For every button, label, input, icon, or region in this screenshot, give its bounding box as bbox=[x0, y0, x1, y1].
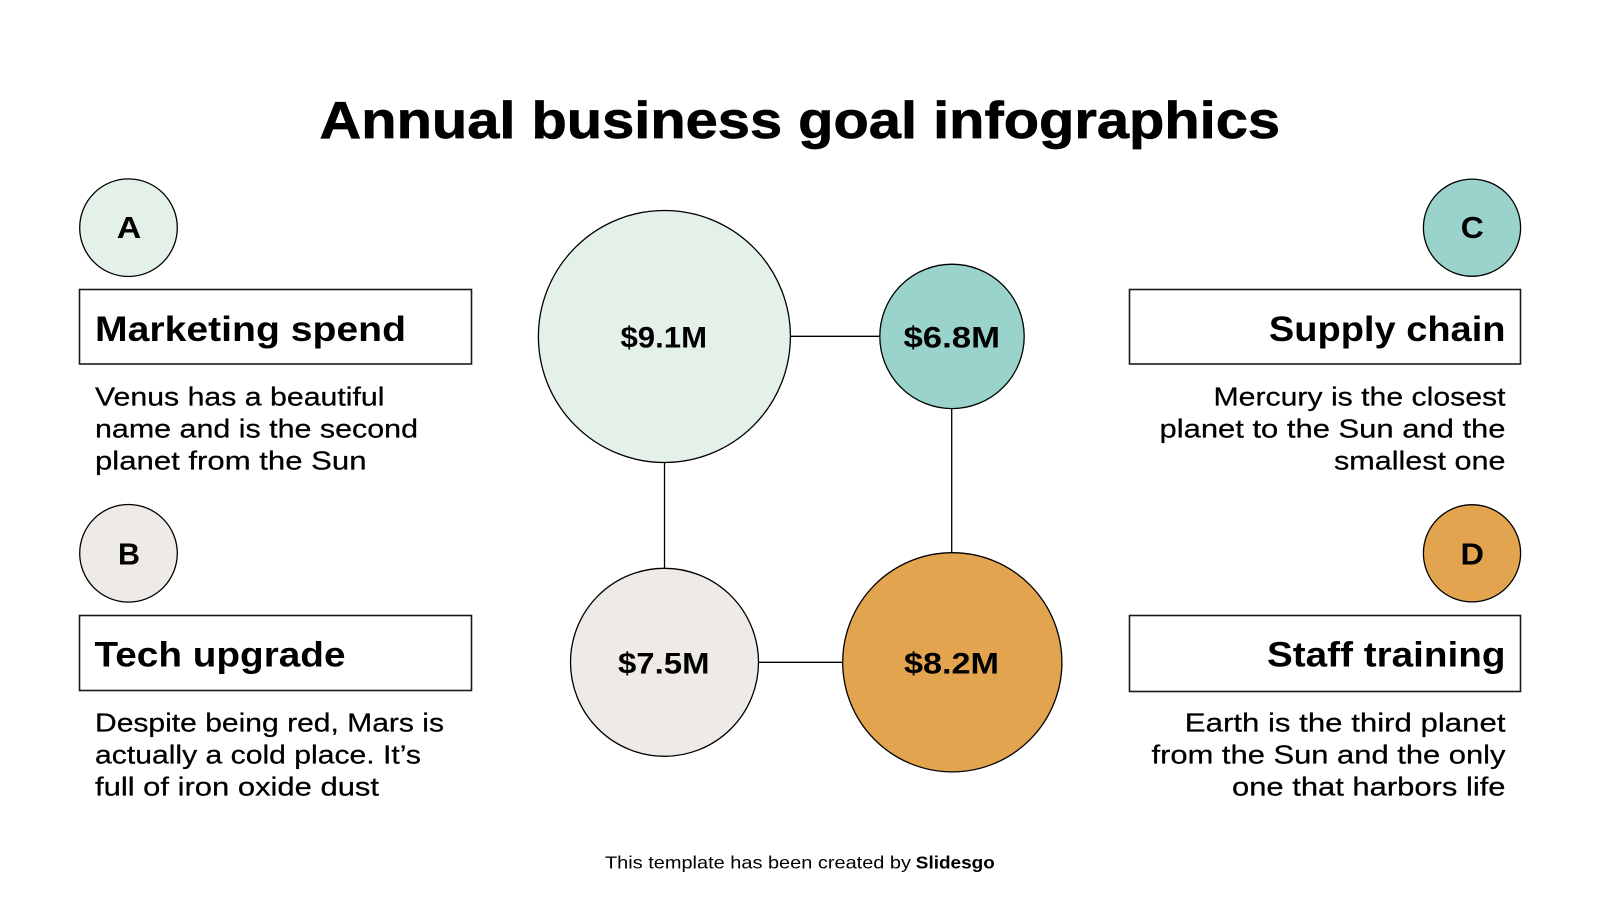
badge D: D bbox=[1460, 536, 1484, 571]
heading box bbox=[1130, 616, 1520, 692]
description: smallest one bbox=[1334, 446, 1506, 476]
bubble: $9.1M: $9.1M bbox=[620, 322, 707, 355]
description: name and is the second bbox=[95, 414, 418, 444]
heading box bbox=[80, 616, 472, 690]
badge B: B bbox=[118, 536, 140, 571]
bubble: $6.8M: $6.8M bbox=[904, 322, 1000, 355]
description: actually a cold place. It’s bbox=[95, 739, 421, 769]
panel: B Tech upgrade bbox=[80, 504, 472, 802]
connector: right bbox=[951, 408, 953, 552]
description bbox=[1152, 708, 1506, 802]
connector: top bbox=[790, 335, 880, 337]
badge A: A bbox=[117, 210, 141, 245]
connector: left bbox=[664, 462, 666, 568]
heading box: Marketing spend bbox=[95, 310, 406, 349]
description: Mercury is the closest bbox=[1214, 382, 1506, 412]
heading box bbox=[1130, 290, 1520, 364]
connector: bottom bbox=[759, 661, 842, 663]
footer credit bbox=[605, 852, 995, 872]
description: Earth is the third planet bbox=[1185, 708, 1506, 738]
badge C bbox=[1423, 179, 1521, 276]
badge D bbox=[1423, 505, 1521, 602]
title: Annual business goal infographics bbox=[320, 92, 1280, 150]
panel: C Supply chain bbox=[1130, 179, 1521, 476]
description: from the Sun and the only bbox=[1152, 739, 1506, 769]
footer credit: Slidesgo bbox=[916, 852, 995, 872]
description bbox=[95, 708, 444, 802]
description: one that harbors life bbox=[1232, 772, 1506, 802]
bubble: $7.5M: $7.5M bbox=[618, 647, 710, 680]
panel: A Marketing spend bbox=[80, 179, 472, 476]
footer credit: This template has been created by bbox=[605, 852, 911, 872]
heading box: Tech upgrade bbox=[94, 636, 346, 675]
heading box: Supply chain bbox=[1269, 310, 1506, 349]
description: full of iron oxide dust bbox=[95, 772, 380, 802]
description: planet to the Sun and the bbox=[1160, 414, 1506, 444]
panel: D Staff training bbox=[1130, 505, 1521, 802]
badge A bbox=[80, 179, 177, 276]
description: Venus has a beautiful bbox=[95, 382, 384, 412]
description bbox=[1160, 382, 1506, 476]
bubble: $7.5M bbox=[570, 568, 758, 756]
description: planet from the Sun bbox=[95, 446, 366, 476]
description bbox=[95, 382, 418, 476]
heading box bbox=[80, 290, 472, 364]
heading box: Staff training bbox=[1267, 636, 1506, 675]
bubble: $8.2M bbox=[843, 553, 1062, 772]
badge C: C bbox=[1461, 210, 1484, 245]
description: Despite being red, Mars is bbox=[95, 708, 444, 738]
badge B bbox=[80, 504, 177, 602]
bubble: $9.1M bbox=[538, 210, 790, 462]
network diagram bbox=[538, 210, 1062, 772]
bubble: $8.2M: $8.2M bbox=[904, 647, 999, 680]
bubble: $6.8M bbox=[880, 264, 1024, 409]
